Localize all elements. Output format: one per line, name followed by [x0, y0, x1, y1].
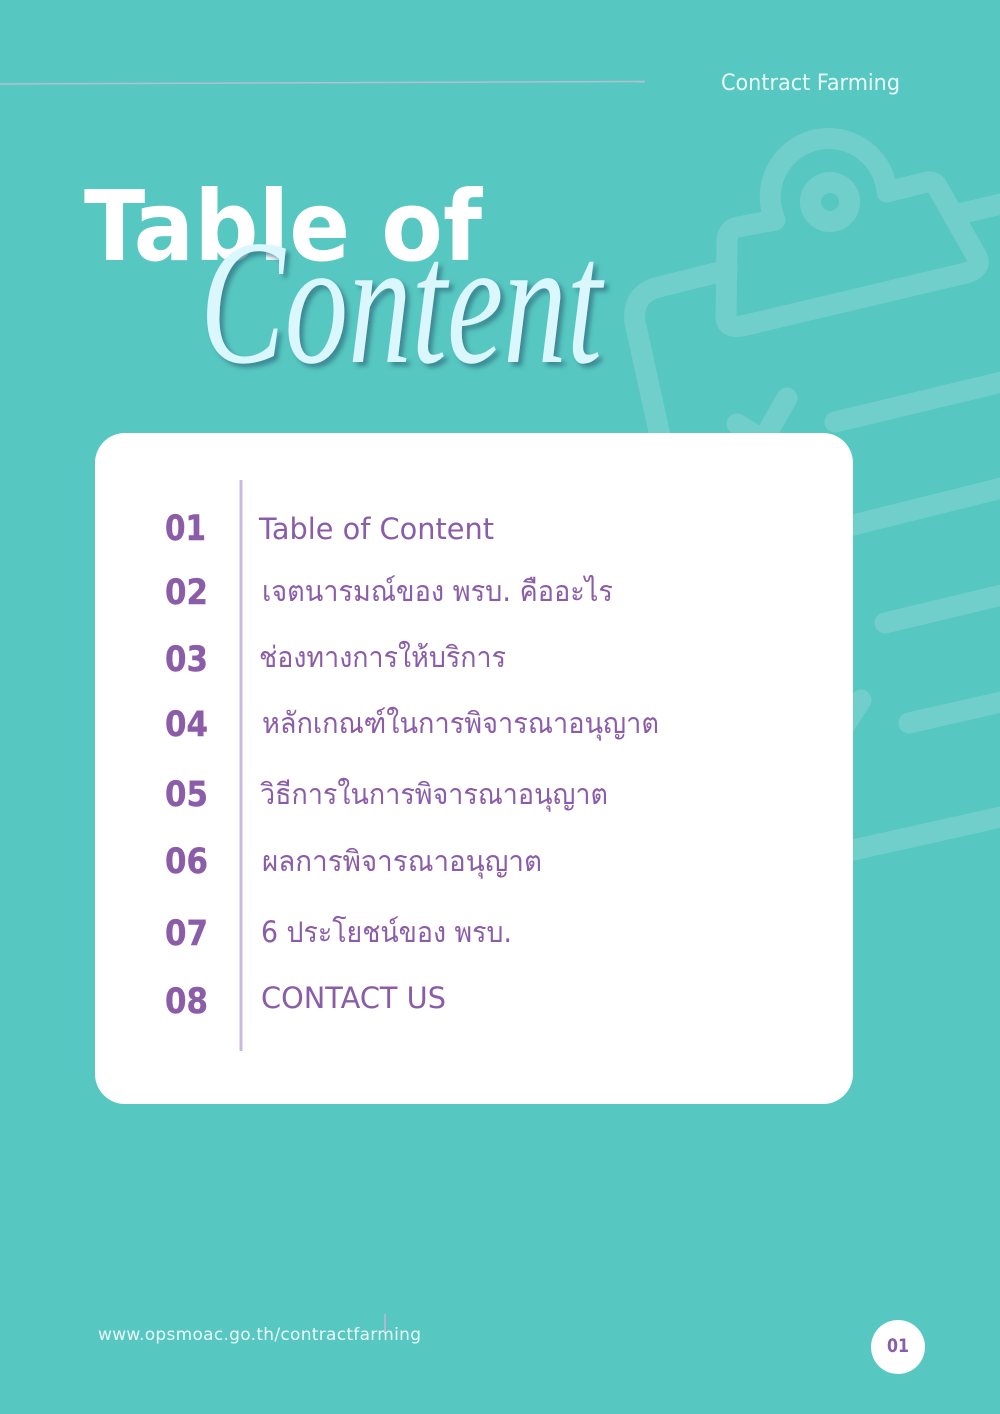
item 08: CONTACT US	[261, 981, 446, 1015]
item 03	[165, 640, 506, 680]
item 03: ช่องทางการให้บริการ	[259, 640, 506, 674]
item 05	[165, 775, 608, 815]
item 03: 03	[165, 640, 208, 680]
item 02: เจตนารมณ์ของ พรบ. คืออะไร	[262, 574, 613, 608]
item 04: 04	[165, 705, 208, 745]
item 04: หลักเกณฑ์ในการพิจารณาอนุญาต	[262, 706, 659, 741]
item 06: 06	[165, 842, 208, 882]
item 04	[165, 705, 659, 745]
item 07	[165, 914, 512, 954]
item 07: 6 ประโยชน์ของ พรบ.	[261, 915, 512, 949]
item 02: 02	[165, 573, 208, 613]
footer url: www.opsmoac.go.th/contractfarming	[98, 1325, 421, 1345]
page number badge	[871, 1320, 925, 1374]
item 01: Table of Content	[258, 512, 494, 546]
item 07: 07	[165, 914, 208, 954]
item 08: 08	[165, 982, 208, 1022]
title	[84, 170, 605, 401]
item 01: 01	[165, 509, 206, 549]
title: Table of: Table of	[84, 170, 484, 283]
item 05: วิธีการในการพิจารณาอนุญาต	[260, 777, 608, 812]
item 01	[165, 509, 494, 549]
icon: clipboard background	[635, 138, 1000, 854]
top rule	[0, 82, 645, 84]
page number badge: 01	[887, 1335, 909, 1357]
item 02	[165, 573, 613, 613]
panel: contents card	[95, 433, 853, 1104]
item 06: ผลการพิจารณาอนุญาต	[262, 844, 542, 879]
header label: Contract Farming	[721, 71, 900, 96]
item 06	[165, 842, 542, 882]
item 05: 05	[165, 775, 208, 815]
title: Content script: Content	[200, 203, 605, 401]
item 08	[165, 981, 446, 1022]
